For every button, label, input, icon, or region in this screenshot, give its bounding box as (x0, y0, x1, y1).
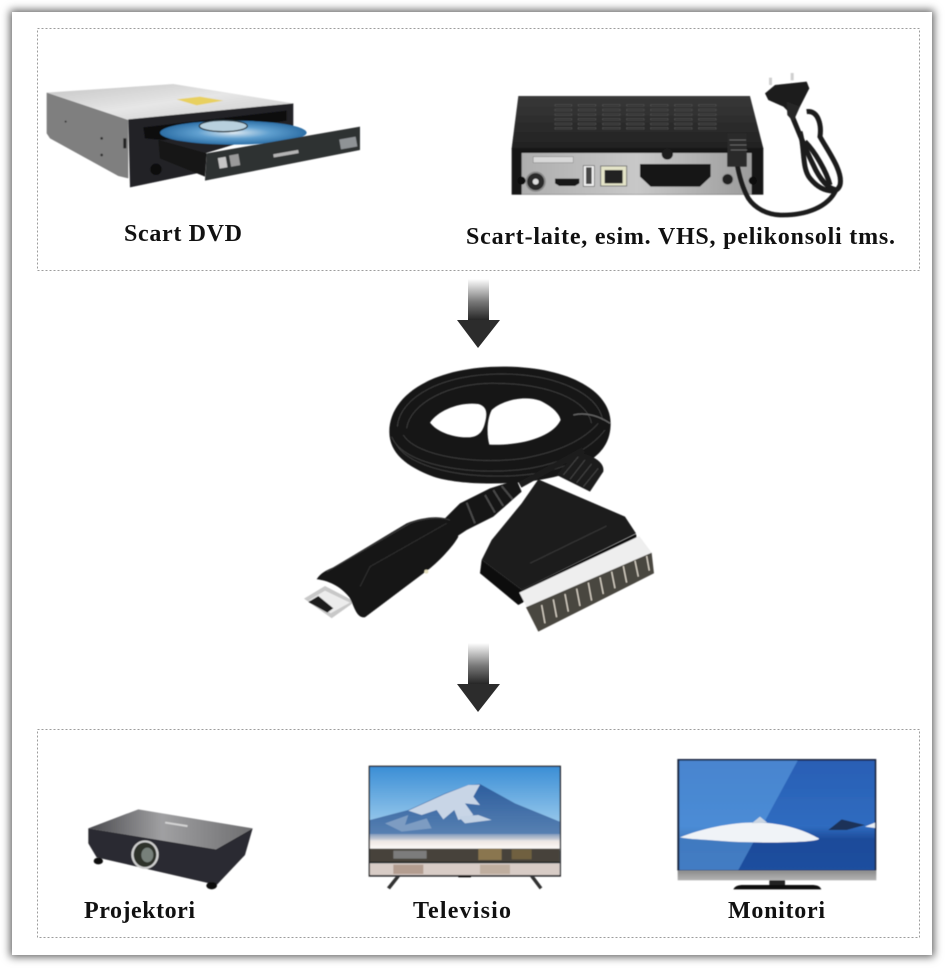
label: Projektori: Projektori (84, 898, 195, 924)
icon: projector (88, 809, 253, 889)
Scart boot (557, 452, 603, 492)
strain relief (445, 480, 522, 537)
Scart body (482, 479, 636, 590)
icon: television (369, 766, 561, 889)
label: Monitori: Monitori (728, 898, 825, 924)
vents (555, 105, 716, 129)
thin cable (520, 450, 583, 485)
icon: Scart to HDMI adapter cable (304, 367, 654, 632)
HDMI metal tip (304, 586, 355, 618)
coiled cable (389, 367, 611, 484)
icon: set-top box (512, 96, 763, 195)
HDMI body (317, 517, 458, 617)
label: Scart device: Scart-laite, esim. VHS, pelikonsoli tms. (466, 224, 895, 250)
label: Televisio: Televisio (413, 898, 511, 924)
Scart metal (519, 536, 652, 608)
arrow: down to adapter (457, 279, 500, 348)
panel: output devices (38, 730, 920, 938)
panel: source devices (38, 28, 920, 270)
icon: monitor (677, 759, 876, 889)
arrow: down to displays (457, 643, 500, 712)
icon: DVD drive (47, 84, 360, 187)
label: Scart DVD: Scart DVD (124, 221, 242, 247)
icon: power cord and plug (727, 73, 840, 215)
ports (526, 172, 545, 191)
